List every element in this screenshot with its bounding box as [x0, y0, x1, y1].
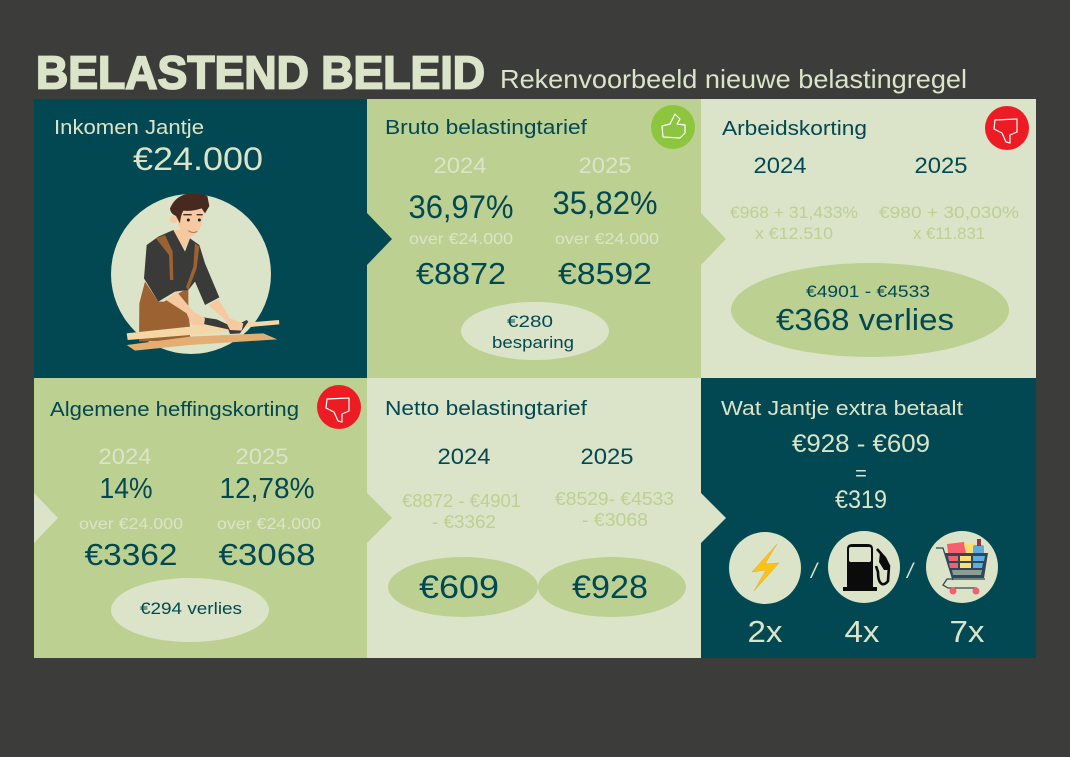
column: netto 2025: - €3068	[582, 510, 648, 530]
icon: thumbs down	[985, 106, 1029, 150]
icon: thumbs down	[317, 385, 361, 429]
icon: lightning	[729, 532, 801, 604]
formula: arbeidskorting 2024	[730, 203, 858, 243]
column: heffingskorting 2025: €3068	[218, 537, 316, 572]
icon: thumbs up	[651, 105, 695, 149]
column: bruto 2024: 36,97%	[408, 189, 514, 225]
arrow: from netto to extra betaalt	[701, 493, 726, 543]
callout: verlies arbeidskorting: €368 verlies	[776, 302, 954, 337]
multiplier: 4x: 4x	[844, 614, 880, 649]
illustration: carpenter	[111, 194, 279, 354]
multiplier: 2x: 2x	[748, 614, 783, 649]
panel: bruto belastingtarief	[367, 99, 701, 378]
heading: heffingskorting: Algemene heffingskorting	[50, 399, 299, 421]
column: heffingskorting 2024: 14%	[100, 473, 152, 505]
column: heffingskorting 2025	[217, 444, 321, 572]
calculation: extra betaalt: =	[855, 463, 867, 485]
callout: besparing	[461, 302, 609, 360]
year labels	[754, 153, 968, 178]
arrow: from heffingskorting to netto	[367, 493, 392, 543]
separator slash: /	[809, 560, 819, 583]
icon: fuel pump	[828, 531, 900, 603]
heading: inkomen: Inkomen Jantje	[54, 117, 204, 139]
title: BELASTEND BELEID	[36, 46, 485, 98]
formula: arbeidskorting 2025	[879, 203, 1019, 243]
arrow: from inkomen to bruto	[367, 213, 392, 265]
column: bruto 2024: 2024	[434, 153, 486, 178]
panel: wat Jantje extra betaalt	[701, 378, 1036, 658]
callout: verlies arbeidskorting	[731, 263, 1009, 357]
year labels: 2025	[914, 153, 968, 178]
calculation: extra betaalt: €319	[835, 486, 887, 514]
column: bruto 2025: 2025	[578, 153, 632, 178]
formula: arbeidskorting 2024: €968 + 31,433%	[730, 203, 858, 222]
icon: shopping cart	[926, 531, 998, 603]
column: bruto 2024	[408, 153, 514, 291]
panel: inkomen Jantje	[34, 99, 368, 378]
callout: verlies heffingskorting	[111, 578, 269, 642]
column: bruto 2025: 35,82%	[552, 185, 658, 221]
column: heffingskorting 2024	[79, 444, 183, 572]
callout: verlies arbeidskorting: €4901 - €4533	[806, 282, 930, 301]
column: heffingskorting 2025: 2025	[236, 444, 288, 469]
heading: netto: Netto belastingtarief	[385, 398, 587, 420]
column: netto 2025	[538, 444, 686, 617]
multiplier: 7x: 7x	[950, 614, 985, 649]
column: bruto 2024: €8872	[416, 256, 506, 291]
subtitle: Rekenvoorbeeld nieuwe belastingregel	[500, 64, 967, 94]
heading: arbeidskorting: Arbeidskorting	[722, 118, 867, 140]
callout: besparing: besparing	[492, 333, 574, 352]
arrow: from bruto to arbeidskorting	[701, 213, 726, 265]
column: netto 2025: €928	[572, 569, 648, 605]
column: bruto 2025: over €24.000	[555, 231, 659, 248]
column: heffingskorting 2025: 12,78%	[220, 473, 314, 505]
column: heffingskorting 2024: €3362	[84, 537, 178, 572]
column: netto 2024: €609	[419, 569, 499, 605]
column: netto 2025: 2025	[580, 444, 634, 469]
column: bruto 2025	[552, 153, 659, 291]
formula: arbeidskorting 2025: €980 + 30,030%	[879, 203, 1019, 222]
panel: algemene heffingskorting	[34, 378, 368, 658]
amount: income: €24.000	[133, 141, 263, 177]
panel: netto belastingtarief	[367, 378, 701, 658]
column: netto 2025: €8529- €4533	[555, 489, 674, 509]
callout: besparing: €280	[507, 312, 553, 331]
year labels: 2024	[754, 153, 806, 178]
panel: arbeidskorting	[701, 99, 1036, 378]
column: bruto 2024: over €24.000	[409, 231, 513, 248]
calculation: extra betaalt: €928 - €609	[792, 430, 930, 458]
heading: extra betaalt: Wat Jantje extra betaalt	[721, 398, 964, 420]
column: netto 2024: €8872 - €4901	[402, 491, 521, 511]
column: heffingskorting 2024: over €24.000	[79, 516, 183, 533]
column: bruto 2025: €8592	[558, 256, 652, 291]
column: heffingskorting 2024: 2024	[98, 444, 152, 469]
callout: verlies heffingskorting: €294 verlies	[140, 599, 242, 618]
heading: bruto: Bruto belastingtarief	[385, 117, 587, 139]
column: netto 2024	[388, 444, 538, 617]
formula: arbeidskorting 2025: x €11.831	[913, 224, 985, 243]
column: heffingskorting 2025: over €24.000	[217, 516, 321, 533]
calculation: extra betaalt	[792, 430, 930, 514]
arrow: into algemene heffingskorting	[34, 493, 58, 543]
column: netto 2024: - €3362	[432, 512, 496, 532]
column: netto 2024: 2024	[438, 444, 490, 469]
formula: arbeidskorting 2024: x €12.510	[755, 224, 833, 243]
separator slash: /	[905, 560, 915, 583]
